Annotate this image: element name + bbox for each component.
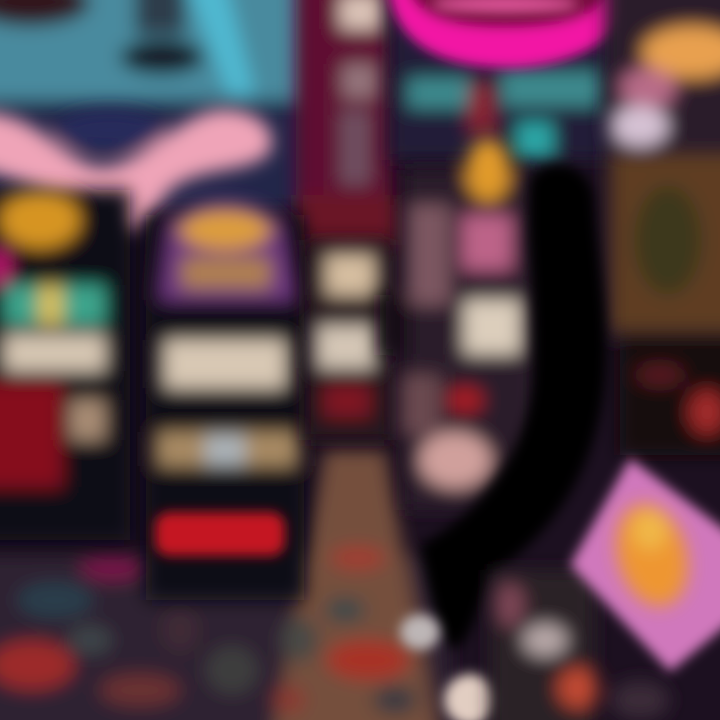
middle slot machine xyxy=(146,200,304,600)
right wall xyxy=(605,0,720,455)
lower right floor sign xyxy=(490,458,720,720)
magenta neon sign xyxy=(388,0,636,68)
black curved silhouette xyxy=(420,165,606,650)
distant machines in aisle xyxy=(305,240,390,440)
ceiling xyxy=(0,0,310,210)
carpet xyxy=(0,450,450,720)
teal upper right xyxy=(390,0,625,160)
shoes xyxy=(400,614,496,720)
pink wave xyxy=(0,109,272,231)
crimson column xyxy=(296,0,396,245)
left slot machine xyxy=(0,190,130,540)
right slot machine xyxy=(380,138,535,510)
